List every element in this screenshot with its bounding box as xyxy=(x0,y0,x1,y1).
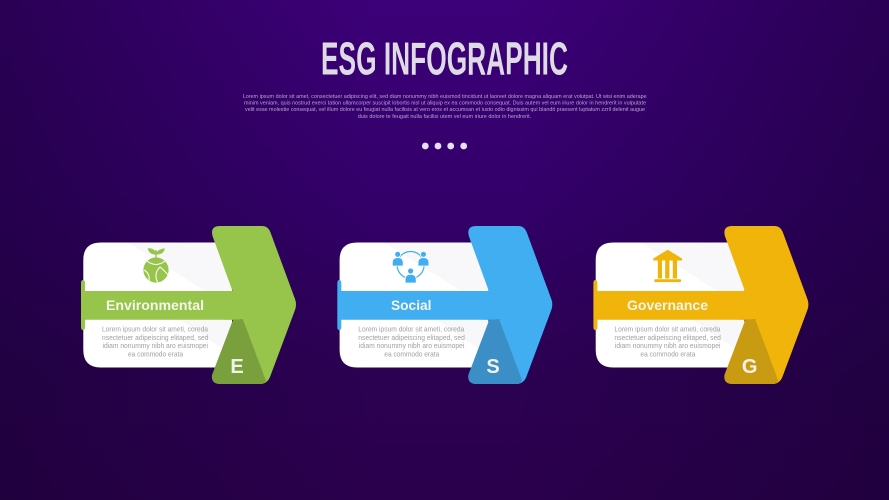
letter: E xyxy=(230,356,244,378)
arrow fold xyxy=(212,320,266,384)
description: Lorem ipsum dolor sit ameti, coreda xyxy=(614,324,721,334)
arrow head xyxy=(468,226,552,384)
intro text block: velit esse molestie consequat, vel illum dolore eu feugiat nulla facilisis at vero eros et accumsan et iusto odio dignissim qui blandit praesent luptatum zzril delenit augue xyxy=(245,107,645,113)
pagination dots xyxy=(422,143,467,149)
intro text block xyxy=(243,94,647,120)
description: ea commodo erata xyxy=(384,350,440,358)
icon: plant globe xyxy=(143,249,169,283)
description: nsectetuer adipeiscing elitaped, sed xyxy=(102,333,208,342)
white card xyxy=(340,242,488,368)
icon: people circle xyxy=(392,251,429,283)
card shading xyxy=(640,242,744,355)
arrow band xyxy=(593,280,752,330)
description: ea commodo erata xyxy=(128,350,184,358)
description: idiam nonummy nibh aro euismopei xyxy=(102,341,208,350)
arrow band xyxy=(81,280,240,330)
intro text block: Lorem ipsum dolor sit amet, consectetuer adipiscing elit, sed diam nonummy nibh euismod tincidunt ut laoreet dolore magna aliquam erat volutpat. Ut wisi enim aderape xyxy=(243,94,647,100)
panel: governance xyxy=(593,226,808,384)
description: nsectetuer adipeiscing elitaped, sed xyxy=(614,333,721,342)
arrow fold xyxy=(724,320,778,384)
white card xyxy=(83,242,232,368)
arrow head xyxy=(212,226,296,384)
heading: Governance xyxy=(627,298,708,313)
description: idiam nonummy nibh aro euismopei xyxy=(615,341,721,350)
description: ea commodo erata xyxy=(640,350,696,358)
white card xyxy=(596,242,744,368)
description xyxy=(102,324,209,358)
description: idiam nonummy nibh aro euismopei xyxy=(359,341,465,350)
heading: Social xyxy=(391,298,431,313)
intro text block: duis dolore te feugait nulla facilisi utem vel eum iriure dolor in hendrerit. xyxy=(358,114,532,120)
arrow band xyxy=(337,280,496,330)
panel: environmental xyxy=(81,226,296,384)
description xyxy=(358,324,465,358)
arrow head xyxy=(724,226,808,384)
description: Lorem ipsum dolor sit ameti, coreda xyxy=(358,324,465,334)
arrow fold xyxy=(468,320,522,384)
intro text block: minim veniam, quis nostrud exerci tation ullamcorper suscipit lobortis nisl ut aliquip ex ea commodo consequat. Duis autem vel eum iriure dolor in hendrerit in vulputate xyxy=(244,100,646,106)
panel: social xyxy=(337,226,552,384)
icon: bank building xyxy=(653,250,682,282)
letter: S xyxy=(486,356,500,378)
description: Lorem ipsum dolor sit ameti, coreda xyxy=(102,324,209,334)
card shading xyxy=(384,242,488,355)
letter: G xyxy=(742,356,757,378)
card shading xyxy=(128,242,232,355)
heading: Environmental xyxy=(106,298,204,313)
description: nsectetuer adipeiscing elitaped, sed xyxy=(358,333,465,342)
title: ESG INFOGRAPHIC xyxy=(321,32,568,84)
description xyxy=(614,324,721,358)
